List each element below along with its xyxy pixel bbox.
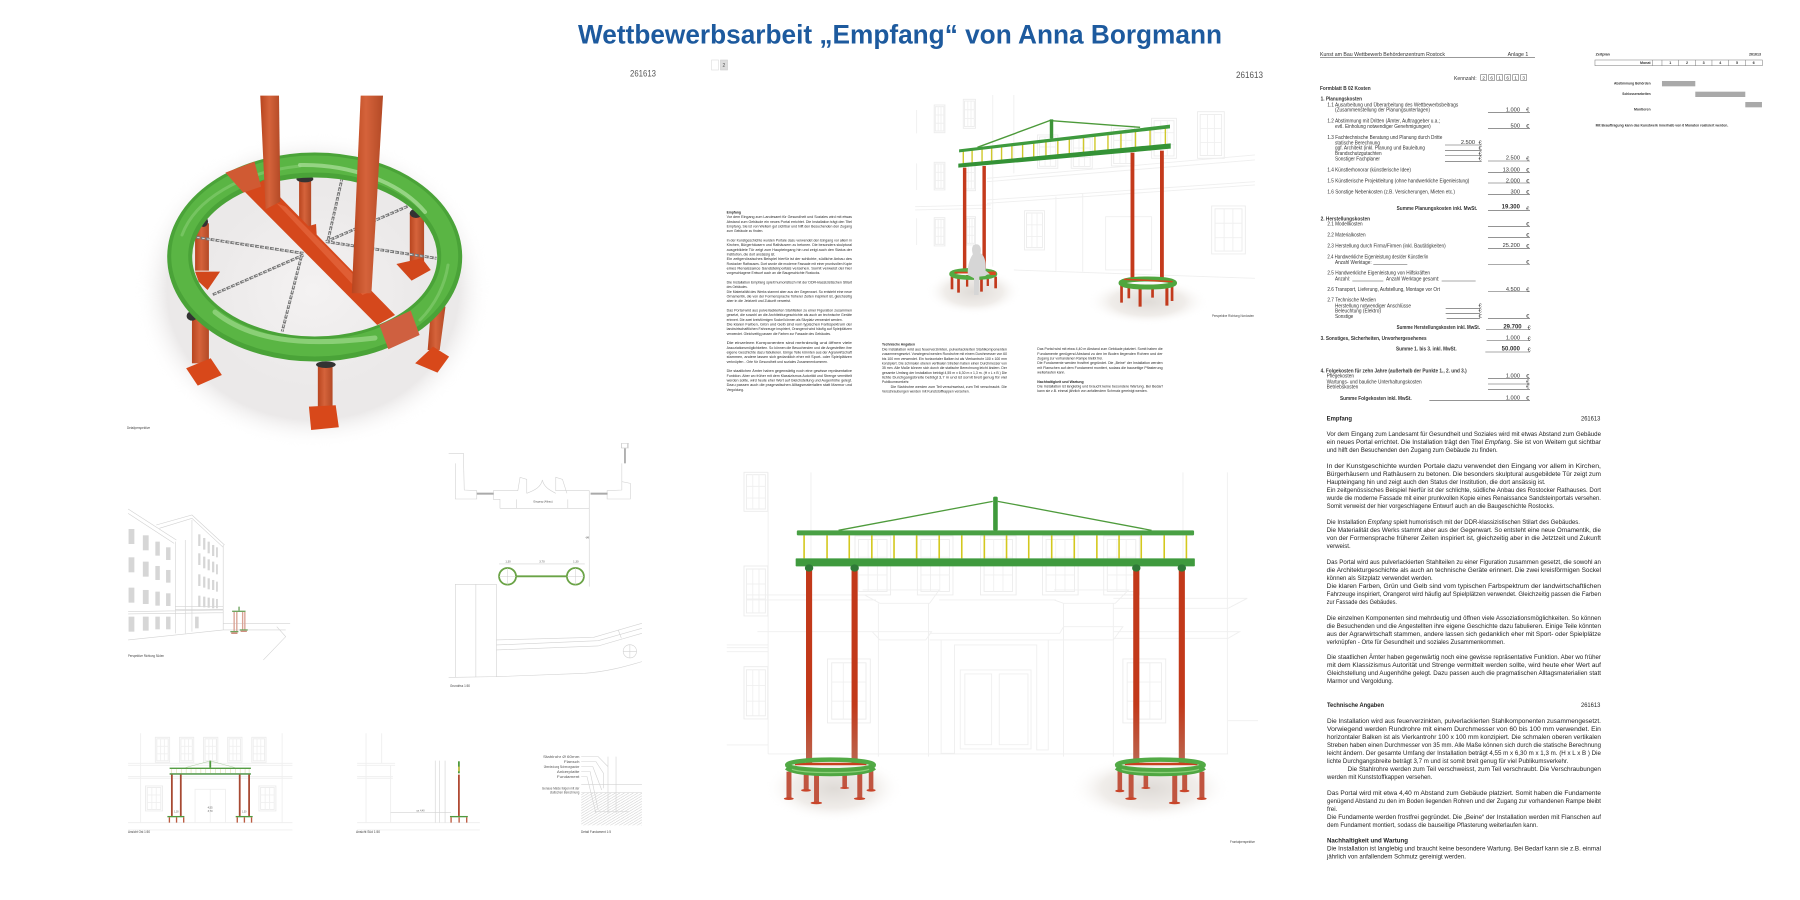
gantt labels: Mit Beauftragung kann das Kunstwerk innerhalb von 6 Monaten realisiert werden. bbox=[1596, 123, 1728, 127]
text block: concept and technical data right: Nachhaltigkeit und Wartung bbox=[1327, 838, 1408, 845]
amount values: € bbox=[1526, 287, 1530, 293]
amount values: € bbox=[1478, 304, 1482, 310]
text block: Empfang column: eines Renaissance Sandsteinportals versehen. Somit verweist der hier bbox=[727, 266, 852, 270]
text block: concept description right: ein neues Portal errichtet. Die Installation trägt den Titel Empfang. Sie ist von Weitem gut sichtbar bbox=[1327, 439, 1601, 446]
amount values: € bbox=[1526, 244, 1530, 250]
form rows: 2.5 Handwerkliche Eigenleistung von Hilfskräften bbox=[1327, 271, 1430, 277]
amount values: 1.000 bbox=[1506, 395, 1520, 401]
detail perspective render: ring seat bbox=[135, 96, 491, 448]
form header bbox=[1320, 52, 1535, 82]
amount values: 1.000 bbox=[1506, 336, 1520, 342]
text block: concept description right: Die Materialität des Werks stammt aber aus der Gegenwart. So entsteht eine neue Ornamentik, die bbox=[1327, 527, 1601, 534]
gantt bars bbox=[1662, 81, 1762, 107]
right ring bench bbox=[1120, 279, 1175, 307]
text block: concept description right: Die Installation Empfang spielt humoristisch mit der DDR-klassizistischen Stilart des Gebäudes. bbox=[1327, 519, 1580, 526]
form rows: statische Berechnung bbox=[1335, 140, 1380, 146]
amount values: 500 bbox=[1511, 123, 1520, 129]
apex with guy wires bbox=[977, 119, 1140, 147]
side view of portal bbox=[450, 761, 468, 823]
code boxes: 1 bbox=[1498, 75, 1501, 80]
apex with guy wires bbox=[839, 497, 1152, 531]
amount rules bbox=[1352, 264, 1530, 400]
gantt labels: Abstimmung Behörden bbox=[1614, 81, 1651, 85]
text block: technical data column: Die Stahlrohre werden zum Teil verschweisst, zum Teil verschraubt. Die bbox=[891, 385, 1007, 389]
ladder beams bbox=[959, 125, 1170, 152]
amount values: € bbox=[1527, 336, 1531, 342]
form rows: Betriebskosten bbox=[1327, 384, 1358, 390]
code boxes: 6 bbox=[1490, 75, 1493, 80]
form rows: evtl. Einholung notwendiger Genehmigungen) bbox=[1335, 124, 1431, 130]
plan labels bbox=[505, 500, 589, 563]
shadows bbox=[765, 755, 903, 822]
text block: Empfang column: Empfang. Sie ist von Weitem gut sichtbar und hilft den Besuchenden den Zugang bbox=[727, 224, 852, 228]
text block: technical data column: 35 mm. Alle Maße können sich durch die statische Berechnung leicht ändern. Der bbox=[882, 366, 1007, 370]
text block: concept and technical data right: Die Fundamente werden frostfrei gegründet. Die „Beine“ der Installation werden mit Flanschen auf bbox=[1327, 814, 1601, 821]
text block: concept description right: von der Formensprache früherer Zeiten inspiriert ist, gleichzeitig aber in die Jetztzeit und Zukunft bbox=[1327, 535, 1601, 542]
text block: Empfang column: eigene Geschichte dazu fabulieren. Einige Teile könnten aus der Agrarwirtschaft bbox=[727, 350, 852, 354]
text block: Empfang column: Kirchen, Bürgerhäusern und Rathäusern zu betonen. Die besonders skulptural bbox=[727, 243, 852, 247]
text block: concept description right: Fahrzeuge inspiriert, Orangerot wird häufig auf Spielplätzen verwendet. Gleichzeitig passen die Farben bbox=[1327, 591, 1601, 598]
posts left and right bbox=[963, 151, 1164, 282]
amount values: € bbox=[1526, 108, 1530, 114]
schedule heading: Zeitplan bbox=[1596, 53, 1610, 57]
text block: technical data column: Publikumsverkehr. bbox=[882, 380, 909, 384]
amount values: € bbox=[1527, 325, 1531, 331]
text block: Empfang column: des Gebäudes. bbox=[727, 285, 748, 289]
amount rules bbox=[1445, 112, 1530, 248]
text block: technical data column: Verschraubungen werden mit Kunststoffkappen versehen. bbox=[882, 389, 970, 393]
text block: technical data column bbox=[882, 342, 1007, 393]
month table: 2 bbox=[1686, 61, 1688, 65]
text block: Empfang column: landwirtschaftlichen Fahrzeuge inspiriert, Orangerot wird häufig auf Spielplätzen bbox=[727, 327, 852, 331]
project number: left page: 261613 bbox=[630, 68, 656, 78]
foundation labels: Genaue Maße folgen mit der bbox=[542, 786, 580, 790]
text block: concept description right: die Architekturgeschichte als auch an technische Geräte erinnert. Die zwei kreisförmigen Sockel bbox=[1327, 567, 1601, 574]
form rows: 2.1 Modellkosten bbox=[1327, 222, 1363, 228]
text block: placement and maintenance column: Nachhaltigkeit und Wartung bbox=[1037, 380, 1084, 384]
text block: placement and maintenance column: Die Installation ist langlebig und braucht keine besondere Wartung. Bei Bedarf bbox=[1037, 384, 1163, 388]
amount values: 2.500 bbox=[1506, 155, 1520, 161]
text block: technical data column: bis 100 mm verwendet. Ein horizontaler Balken ist als Vierkantrohr 100 x 100 mm bbox=[882, 357, 1007, 361]
foundation labels: statischen Berechnung bbox=[550, 790, 579, 794]
text block: Empfang column bbox=[727, 210, 852, 392]
text block: concept description right: zur Fassade des Gebäudes. bbox=[1327, 599, 1397, 606]
foundation labels: Überdeckung Sicherungsanker bbox=[544, 765, 580, 769]
month table: 6 bbox=[1753, 61, 1755, 65]
yellow struts bbox=[804, 535, 1186, 558]
form rows bbox=[1321, 255, 1480, 402]
text block: concept and technical data right: Die staatlichen Ämter haben gegenwärtig noch eine gewisse repräsentative Funktion. Aber wo früher bbox=[1327, 653, 1601, 661]
text block: Empfang column: Die klaren Farben, Grün und Gelb sind vom typischen Farbspektrum der bbox=[727, 322, 852, 326]
text block: Empfang column: Institution, die dort ansässig ist. bbox=[727, 252, 775, 256]
text block: concept and technical data right: Gleichstellung und Augenhöhe gelegt. Dazu passen auch die pragmatischen Alltagsmaterialien statt bbox=[1327, 670, 1601, 677]
text block: concept description right: 261613 bbox=[1581, 415, 1601, 422]
render: frontal perspective bbox=[727, 472, 1258, 822]
text block: concept description right: Ein zeitgenössisches Beispiel hierfür ist der schlichte, südliche Anbau des Rostocker Rathauses. Dort bbox=[1327, 487, 1601, 494]
dimensions east elevation: 3,70 bbox=[208, 809, 213, 813]
amount values: 4.500 bbox=[1506, 287, 1520, 293]
time schedule bbox=[1595, 53, 1762, 127]
plan labels: 1,30 bbox=[505, 560, 511, 563]
form rows: Summe 1. bis 3. inkl. MwSt. bbox=[1396, 347, 1457, 353]
form rows: 2.7 Technische Medien bbox=[1327, 298, 1376, 304]
month table bbox=[1595, 60, 1762, 66]
plan labels: 3,70 bbox=[539, 560, 545, 563]
text block: placement and maintenance column: Die Fundamente werden frostfrei gegründet. Die „Beine“ der Installation werden bbox=[1037, 361, 1163, 365]
form rows: Summe Planungskosten inkl. MwSt. bbox=[1397, 206, 1478, 212]
text block: concept and technical data right bbox=[1326, 653, 1601, 861]
caption: perspective south: Perspektive Richtung Süden bbox=[128, 654, 164, 658]
text block: Empfang column: Dazu passen auch die pragmatischen Alltagsmaterialien statt Marmor und bbox=[727, 383, 852, 387]
amount values: 1.000 bbox=[1506, 373, 1520, 379]
amount values: € bbox=[1478, 146, 1482, 152]
text block: technical data column: Technische Angaben bbox=[882, 342, 915, 346]
amount values: € bbox=[1526, 179, 1530, 185]
code boxes: 6 bbox=[1506, 75, 1509, 80]
form header: Kennzahl: bbox=[1454, 76, 1477, 82]
text block: concept and technical data right: werden mit Kunststoffkappen versehen. bbox=[1326, 774, 1433, 781]
text block: Empfang column: Die Installation Empfang spielt humoristisch mit der DDR-klassizistischen Stilart bbox=[727, 280, 852, 284]
amount values bbox=[1478, 260, 1531, 402]
text block: Empfang column: Ein zeitgenössisches Beispiel hierfür ist der schlichte, südliche Anbau des bbox=[727, 257, 852, 261]
dimensions east elevation: 4,55 bbox=[208, 806, 213, 809]
text block: placement and maintenance column: Das Portal wird mit etwa 4,40 m Abstand zum Gebäude platziert. Somit haben die bbox=[1037, 347, 1163, 351]
form rows: 1. Planungskosten bbox=[1321, 97, 1362, 103]
form rows: 1.3 Fachtechnische Beratung und Planung durch Dritte bbox=[1327, 135, 1442, 141]
gantt labels: Schlosserarbeiten bbox=[1622, 92, 1651, 96]
amount values: € bbox=[1527, 347, 1531, 353]
amount values: € bbox=[1526, 314, 1530, 320]
building windows bbox=[129, 529, 218, 632]
month table: 3 bbox=[1703, 61, 1705, 65]
ground shadow bbox=[135, 132, 491, 448]
text block: Empfang column: Ornamentik, die von der Formensprache früherer Zeiten inspiriert ist, gleichzeitig bbox=[727, 294, 852, 298]
text block: concept description right: Das Portal wird aus pulverlackierten Stahlteilen zu einer Figuration zusammen gesetzt, die sowohl an bbox=[1327, 559, 1601, 566]
text block: Empfang column: vorgeschlagene Entwurf auch an die Baugeschichte Rostocks. bbox=[727, 271, 820, 275]
amount values: € bbox=[1526, 396, 1530, 402]
amount values: € bbox=[1526, 206, 1530, 212]
text block: technical data column: Die Installation wird aus feuerverzinkten, pulverlackierten Stahlkomponenten bbox=[882, 347, 1007, 351]
caption: perspective north-east: Perspektive Richtung Nordosten bbox=[1212, 314, 1254, 318]
text block: concept description right: und hilft den Besuchenden den Zugang zum Gebäude zu finden. bbox=[1327, 447, 1498, 454]
post joints bbox=[805, 564, 1186, 572]
text block: Empfang column: verwendet. Gleichzeitig passen die Farben zur Fassade des Gebäudes. bbox=[727, 332, 831, 336]
project number: middle page: 261613 bbox=[1236, 70, 1263, 81]
text block: technical data column: lichte Durchgangsbreite beträgt 3,7 m und ist somit breit genug für viel bbox=[882, 375, 1007, 379]
form rows: 4. Folgekosten für zehn Jahre (außerhalb der Punkte 1., 2. und 3.) bbox=[1321, 369, 1467, 375]
caption: east elevation: Ansicht Ost 1:50 bbox=[128, 830, 150, 834]
amount values: € bbox=[1478, 157, 1482, 163]
text block: Empfang column: verknüpfen - Orte für Gesundheit und soziales Zusammenkommen. bbox=[727, 360, 828, 364]
amount values: 50.000 bbox=[1502, 346, 1521, 352]
yellow struts bbox=[963, 129, 1165, 166]
plan labels: Eingang (Altbau) bbox=[533, 500, 553, 503]
text block: concept description right: können als Sitzplatz verwendet werden. bbox=[1327, 575, 1433, 582]
form rows: ggf. Architekt (inkl. Planung und Bauleitung bbox=[1335, 146, 1425, 152]
foundation labels: Flansch bbox=[564, 760, 579, 764]
form rows: 2.2 Materialkosten bbox=[1327, 233, 1366, 239]
foundation labels bbox=[542, 755, 580, 794]
amount values: € bbox=[1526, 124, 1530, 130]
form rows: 2.6 Transport, Lieferung, Aufstellung, Montage vor Ort bbox=[1327, 287, 1440, 293]
text block: technical data column: gesamte Umfang der Installation beträgt 4,55 m x 6,30 m x 1,3 m. (H x L x B ) Die bbox=[882, 371, 1007, 375]
text block: concept and technical data right: Das Portal wird mit etwa 4,40 m Abstand zum Gebäude platziert. Somit haben die Fundamente bbox=[1327, 790, 1601, 797]
code boxes: 1 bbox=[1514, 75, 1517, 80]
amount values: 2.000 bbox=[1506, 178, 1520, 184]
text block: technical data column: zusammengesetzt. Vorwiegend werden Rundrohre mit einem Durchmesser von 60 bbox=[882, 352, 1007, 356]
text block: concept description right: Somit verweist der hier vorgeschlagene Entwurf auch an die Baugeschichte Rostocks. bbox=[1327, 503, 1555, 510]
drawing: perspective from the south bbox=[128, 509, 290, 660]
small portal front bbox=[167, 761, 253, 823]
page markers bbox=[712, 60, 728, 70]
text block: Empfang column: Die staatlichen Ämter haben gegenwärtig noch eine gewisse repräsentative bbox=[727, 369, 852, 373]
month table: Monat bbox=[1640, 61, 1651, 65]
text block: concept and technical data right: Die Stahlrohre werden zum Teil verschweisst, zum Teil verschraubt. Die Verschraubungen bbox=[1348, 766, 1601, 773]
form rows: Wartungs- und bauliche Unterhaltungskosten bbox=[1327, 379, 1422, 385]
drawing: south elevation bbox=[357, 733, 480, 830]
seated person silhouette bbox=[968, 244, 989, 295]
code boxes: 2 bbox=[1482, 75, 1485, 80]
text block: technical data column: konzipiert. Die schmalen oberen vertikalen Streben haben einen Durchmesser von bbox=[882, 361, 1007, 365]
portal posts bbox=[806, 567, 1185, 763]
amount values: € bbox=[1526, 385, 1530, 391]
green ring bbox=[180, 164, 450, 349]
drawing: foundation detail bbox=[542, 755, 642, 825]
amount values: € bbox=[1526, 168, 1530, 174]
form rows: Sonstige bbox=[1335, 314, 1353, 320]
text block: concept description right: aus der Agrarwirtschaft stammen, andere lassen sich gedanklich eher mit Sport- oder Spielplätze bbox=[1327, 631, 1601, 638]
text block: concept and technical data right: Marmor und Vergoldung. bbox=[1327, 678, 1394, 685]
text block: concept description right: verweist. bbox=[1327, 543, 1351, 550]
text block: concept description right: Die einzelnen Komponenten sind mehrdeutig und öffnen viele Assoziationsmöglichkeiten. So können bbox=[1327, 615, 1601, 622]
dimensions east elevation bbox=[174, 806, 246, 813]
gantt labels: Montieren bbox=[1634, 108, 1651, 112]
form rows: 1.5 Künstlerische Projektleitung (ohne handwerkliche Eigenleistung) bbox=[1327, 178, 1470, 184]
text block: Empfang column: gesetzt, die sowohl an die Architekturgeschichte als auch an technische Geräte bbox=[727, 313, 852, 317]
form header: Anlage 1 bbox=[1508, 52, 1528, 58]
text block: concept description right bbox=[1326, 415, 1601, 646]
amount values: 19.300 bbox=[1502, 205, 1521, 211]
schedule heading: 261613 bbox=[1749, 53, 1761, 57]
text block: concept description right: Haupteingang hin und zeigt auch den Status der Institution, die dort ansässig ist. bbox=[1327, 479, 1546, 486]
caption: foundation detail: Detail Fundament 1:5 bbox=[581, 830, 611, 834]
text block: concept description right: Die klaren Farben, Grün und Gelb sind vom typischen Farbspektrum der landwirtschaftlichen bbox=[1327, 583, 1601, 590]
text block: Empfang column: zum Gebäude zu finden. bbox=[727, 229, 763, 233]
month table: 4 bbox=[1719, 61, 1722, 65]
text block: concept and technical data right: horizontaler Balken ist als Vierkantrohr 100 x 100 mm konzipiert. Die schmalen oberen vertikalen bbox=[1327, 734, 1601, 741]
caption: south elevation: Ansicht Süd 1:50 bbox=[356, 830, 380, 834]
text block: concept and technical data right: genügend Abstand zu den im Boden liegenden Rohren und der Zugang zur vorhandenen Rampe bleibt bbox=[1327, 798, 1601, 805]
text block: concept and technical data right: jährlich von anfallendem Schmutz gereinigt werden. bbox=[1326, 854, 1466, 861]
text block: concept and technical data right: dem Fundament montiert, sodass die bauseitige Pflasterung weiterlaufen kann. bbox=[1327, 822, 1538, 829]
text block: Empfang column: erinnert. Die zwei kreisförmigen Sockel können als Sitzplatz verwendet werden. bbox=[727, 318, 843, 322]
amount values: 2.500 bbox=[1461, 140, 1475, 146]
text block: concept description right: In der Kunstgeschichte wurden Portale dazu verwendet den Eingang vor allem in Kirchen, bbox=[1327, 463, 1601, 470]
amount values: € bbox=[1526, 190, 1530, 196]
text block: concept description right: die Besuchenden und die Angestellten ihre eigene Geschichte dazu fabulieren. Einige Teile könnten bbox=[1327, 623, 1601, 630]
form rows: Pflegekosten bbox=[1327, 374, 1354, 380]
form rows: Sonstiger Fachplaner bbox=[1335, 156, 1380, 162]
text block: concept and technical data right: mit dem Klassizismus Autorität und Strenge vermittelt werden sollte, wird heute eher Wert auf bbox=[1327, 662, 1601, 669]
schedule heading bbox=[1596, 53, 1761, 57]
text block: placement and maintenance column bbox=[1037, 347, 1163, 393]
amount values: € bbox=[1478, 309, 1482, 315]
text block: placement and maintenance column: mit Flanschen auf dem Fundament montiert, sodass die bauseitige Pflasterung bbox=[1037, 366, 1163, 370]
text block: Empfang column: Funktion. Aber wo früher mit dem Klassizismus Autorität und Strenge vermittelt bbox=[727, 374, 852, 378]
title: Wettbewerbsarbeit „Empfang“ von Anna Borgmann bbox=[578, 20, 1222, 50]
form rows: Beleuchtung (Elektro) bbox=[1335, 308, 1381, 314]
facade background bbox=[915, 95, 1255, 278]
amount values: € bbox=[1478, 151, 1482, 157]
text block: Empfang column: stammen, andere lassen sich gedanklich eher mit Sport- oder Spielplätzen bbox=[727, 355, 852, 359]
text block: Empfang column: Empfang bbox=[727, 210, 741, 214]
gantt labels bbox=[1596, 81, 1728, 127]
month table: 5 bbox=[1736, 61, 1738, 65]
left ring bench bbox=[784, 760, 876, 804]
form header: Kunst am Bau Wettbewerb Behördenzentrum Rostock bbox=[1320, 52, 1445, 58]
text block: Empfang column: aber in die Jetztzeit und Zukunft verweist. bbox=[727, 299, 791, 303]
form rows: Herstellung notwendiger Anschlüsse bbox=[1335, 303, 1411, 309]
text block: Empfang column: Die einzelnen Komponenten sind mehrdeutig und öffnen viele bbox=[727, 341, 852, 345]
amount values: € bbox=[1526, 222, 1530, 228]
caption: detail perspective: Detailperspektive bbox=[127, 426, 150, 430]
facade background bbox=[727, 472, 1258, 757]
foundation labels: Ankerplatte bbox=[557, 770, 579, 774]
foundation labels: Fundament bbox=[557, 775, 580, 779]
text block: placement and maintenance column: weiterlaufen kann. bbox=[1037, 370, 1065, 374]
amount values: 29.700 bbox=[1503, 325, 1522, 331]
render: perspective towards north-east bbox=[915, 95, 1255, 325]
amount values: € bbox=[1526, 374, 1530, 380]
text block: concept and technical data right: Die Installation wird aus feuerverzinkten, pulverlackierten Stahlkomponenten zusammengesetzt. bbox=[1327, 718, 1601, 725]
text block: placement and maintenance column: Zugang zur vorhandenen Rampe bleibt frei. bbox=[1037, 356, 1103, 360]
text block: Empfang column: In der Kunstgeschichte wurden Portale dazu verwendet den Eingang vor allem in bbox=[727, 238, 852, 242]
plan labels: 1,30 bbox=[573, 560, 579, 563]
amount values: € bbox=[1478, 141, 1482, 147]
form rows: 1.1 Ausarbeitung und Überarbeitung des Wettbewerbsbeitrags bbox=[1327, 101, 1459, 108]
ladder beams bbox=[797, 530, 1194, 535]
text block: concept and technical data right: Technische Angaben bbox=[1327, 702, 1384, 709]
text block: Empfang column: Rostocker Rathauses. Dort wurde die moderne Fassade mit einer prunkvollen Kopie bbox=[727, 262, 852, 266]
form rows: 1.2 Abstimmung mit Dritten (Ämter, Auftraggeber u.a.; bbox=[1327, 118, 1440, 125]
amount values: 1.000 bbox=[1506, 107, 1520, 113]
dimensions east elevation: 1,30 bbox=[174, 810, 179, 813]
form rows: 1.6 Sonstige Nebenkosten (z.B. Versicherungen, Mieten etc.) bbox=[1327, 189, 1455, 195]
drawing: floor plan: 4,40 bbox=[586, 536, 589, 540]
amount values: € bbox=[1526, 260, 1530, 266]
cost form: production and follow-up costs bbox=[1321, 255, 1531, 402]
diagonal orange beam with sleeves and uprights bbox=[225, 96, 420, 349]
text block: concept and technical data right: Vorwiegend werden Rundrohre mit einem Durchmesser von 60 bis 100 mm verwendet. Ein bbox=[1327, 726, 1601, 733]
text block: concept description right: wurde die moderne Fassade mit einer prunkvollen Kopie eines Renaissance Sandsteinportals versehen. bbox=[1326, 495, 1601, 502]
dimensions east elevation: 1,30 bbox=[242, 810, 246, 813]
plan walls thick segments bbox=[477, 448, 626, 495]
form rows: Anzahl: bbox=[1335, 276, 1350, 282]
text block: Empfang column: werden sollte, wird heute eher Wert auf Gleichstellung und Augenhöhe gelegt. bbox=[727, 378, 852, 382]
text block: Empfang column: Abstand zum Gebäude ein neues Portal errichtet. Die Installation trägt den Titel bbox=[727, 220, 852, 224]
text block: Empfang column: Vor dem Eingang zum Landesamt für Gesundheit und Soziales wird mit etwas bbox=[727, 215, 852, 219]
drawing: east elevation bbox=[128, 733, 292, 830]
drawing: floor plan bbox=[449, 443, 642, 677]
text block: Empfang column: ausgebildete Tür zeigt zum Haupteingang hin und zeigt auch den Status der bbox=[727, 248, 852, 252]
text block: concept description right: Empfang bbox=[1327, 415, 1352, 422]
small portal bbox=[230, 607, 248, 634]
amount values: 25.200 bbox=[1503, 243, 1520, 249]
chains bbox=[196, 175, 437, 332]
amount values: € bbox=[1526, 233, 1530, 239]
text block: Empfang column: Die Materialität des Werks stammt aber aus der Gegenwart. So entsteht eine neue bbox=[727, 290, 852, 294]
distance label: ca. 4,40 bbox=[416, 809, 425, 812]
text block: concept description right: verknüpfen - Orte für Gesundheit und soziales Zusammenkommen. bbox=[1327, 639, 1505, 646]
amount values: € bbox=[1526, 379, 1530, 385]
form rows: 3. Sonstiges, Sicherheiten, Unvorhergesehenes bbox=[1321, 336, 1427, 342]
caption: frontal perspective: Frontalperspektive bbox=[1230, 840, 1255, 844]
text block: concept description right: Bürgerhäusern und Rathäusern zu betonen. Die besonders skulptural ausgebildete Tür zeigt zum bbox=[1327, 471, 1601, 478]
form rows: Formblatt B 02 Kosten bbox=[1320, 86, 1371, 92]
caption: floor plan: Grundriss 1:50 bbox=[450, 684, 470, 688]
shadows bbox=[926, 268, 1021, 315]
form rows: Summe Folgekosten inkl. MwSt. bbox=[1340, 396, 1412, 402]
amount values bbox=[1461, 107, 1530, 250]
amount values: € bbox=[1478, 314, 1482, 320]
code boxes: 3 bbox=[1522, 75, 1525, 80]
form rows: 1.4 Künstlerhonorar (künstlerische Idee) bbox=[1327, 167, 1411, 173]
form rows bbox=[1320, 86, 1478, 250]
text block: Empfang column: Das Portal wird aus pulverlackierten Stahlteilen zu einer Figuration zusammen bbox=[727, 308, 852, 312]
form rows: 2.3 Herstellung durch Firma/Firmen (inkl. Bautätigkeiten) bbox=[1327, 244, 1446, 250]
month table: 1 bbox=[1669, 61, 1671, 65]
form rows: (Zusammenstellung der Planungsunterlagen) bbox=[1335, 108, 1430, 114]
green rings in plan bbox=[499, 568, 584, 585]
text block: concept and technical data right: 261613 bbox=[1581, 702, 1601, 709]
cost form: planning costs bbox=[1320, 52, 1535, 250]
amount values: 13.000 bbox=[1503, 167, 1520, 173]
text block: concept and technical data right: leicht ändern. Der gesamte Umfang der Installation beträgt 4,55 m x 6,30 m x 1,3 m. (H x L x B ) Die bbox=[1327, 750, 1601, 757]
form rows: Brandschutzgutachten bbox=[1335, 151, 1382, 157]
text block: placement and maintenance column: Fundamente genügend Abstand zu den im Boden liegenden Rohren und der bbox=[1037, 352, 1163, 356]
foundation labels: Stahlrohr Ø 60mm bbox=[543, 755, 580, 759]
text block: placement and maintenance column: kann sie z.B. einmal jährlich von anfallendem Schmutz gereinigt werden. bbox=[1037, 389, 1148, 393]
form rows: Anzahl Werktage gesamt: bbox=[1386, 276, 1439, 282]
amount values: 300 bbox=[1511, 189, 1520, 195]
left ring bench bbox=[951, 270, 997, 293]
text block: Empfang column: Assoziationsmöglichkeiten. So können die Besuchenden und die Angestellten ihre bbox=[727, 346, 852, 350]
text block: concept description right: Vor dem Eingang zum Landesamt für Gesundheit und Soziales wird mit etwas Abstand zum Gebäude bbox=[1327, 431, 1601, 438]
amount values: € bbox=[1526, 157, 1530, 163]
text block: concept and technical data right: Streben haben einen Durchmesser von 35 mm. Alle Maße können sich durch die statische Berechnung bbox=[1327, 742, 1601, 749]
page marker glyph bbox=[622, 443, 628, 448]
form rows: Anzahl Werktage: bbox=[1335, 260, 1372, 266]
text block: Empfang column: Vergoldung. bbox=[727, 388, 744, 392]
text block: concept and technical data right: lichte Durchgangsbreite beträgt 3,7 m und ist somit breit genug für viel Publikumsverkehr. bbox=[1327, 758, 1569, 765]
text block: concept and technical data right: frei. bbox=[1327, 806, 1338, 813]
front legs bbox=[186, 307, 449, 430]
form rows: 2. Herstellungskosten bbox=[1321, 216, 1370, 222]
form rows: 2.4 Handwerkliche Eigenleistung des/der Künstler/in bbox=[1327, 255, 1428, 261]
text block: concept and technical data right: Die Installation ist langlebig und braucht keine besondere Wartung. Bei Bedarf kann sie z.B. einmal bbox=[1327, 846, 1601, 853]
right ring bench bbox=[1115, 760, 1207, 804]
code boxes bbox=[1481, 75, 1527, 80]
form rows: Summe Herstellungskosten inkl. MwSt. bbox=[1397, 325, 1480, 331]
back legs bbox=[195, 176, 431, 290]
page markers: 2 bbox=[722, 63, 726, 69]
